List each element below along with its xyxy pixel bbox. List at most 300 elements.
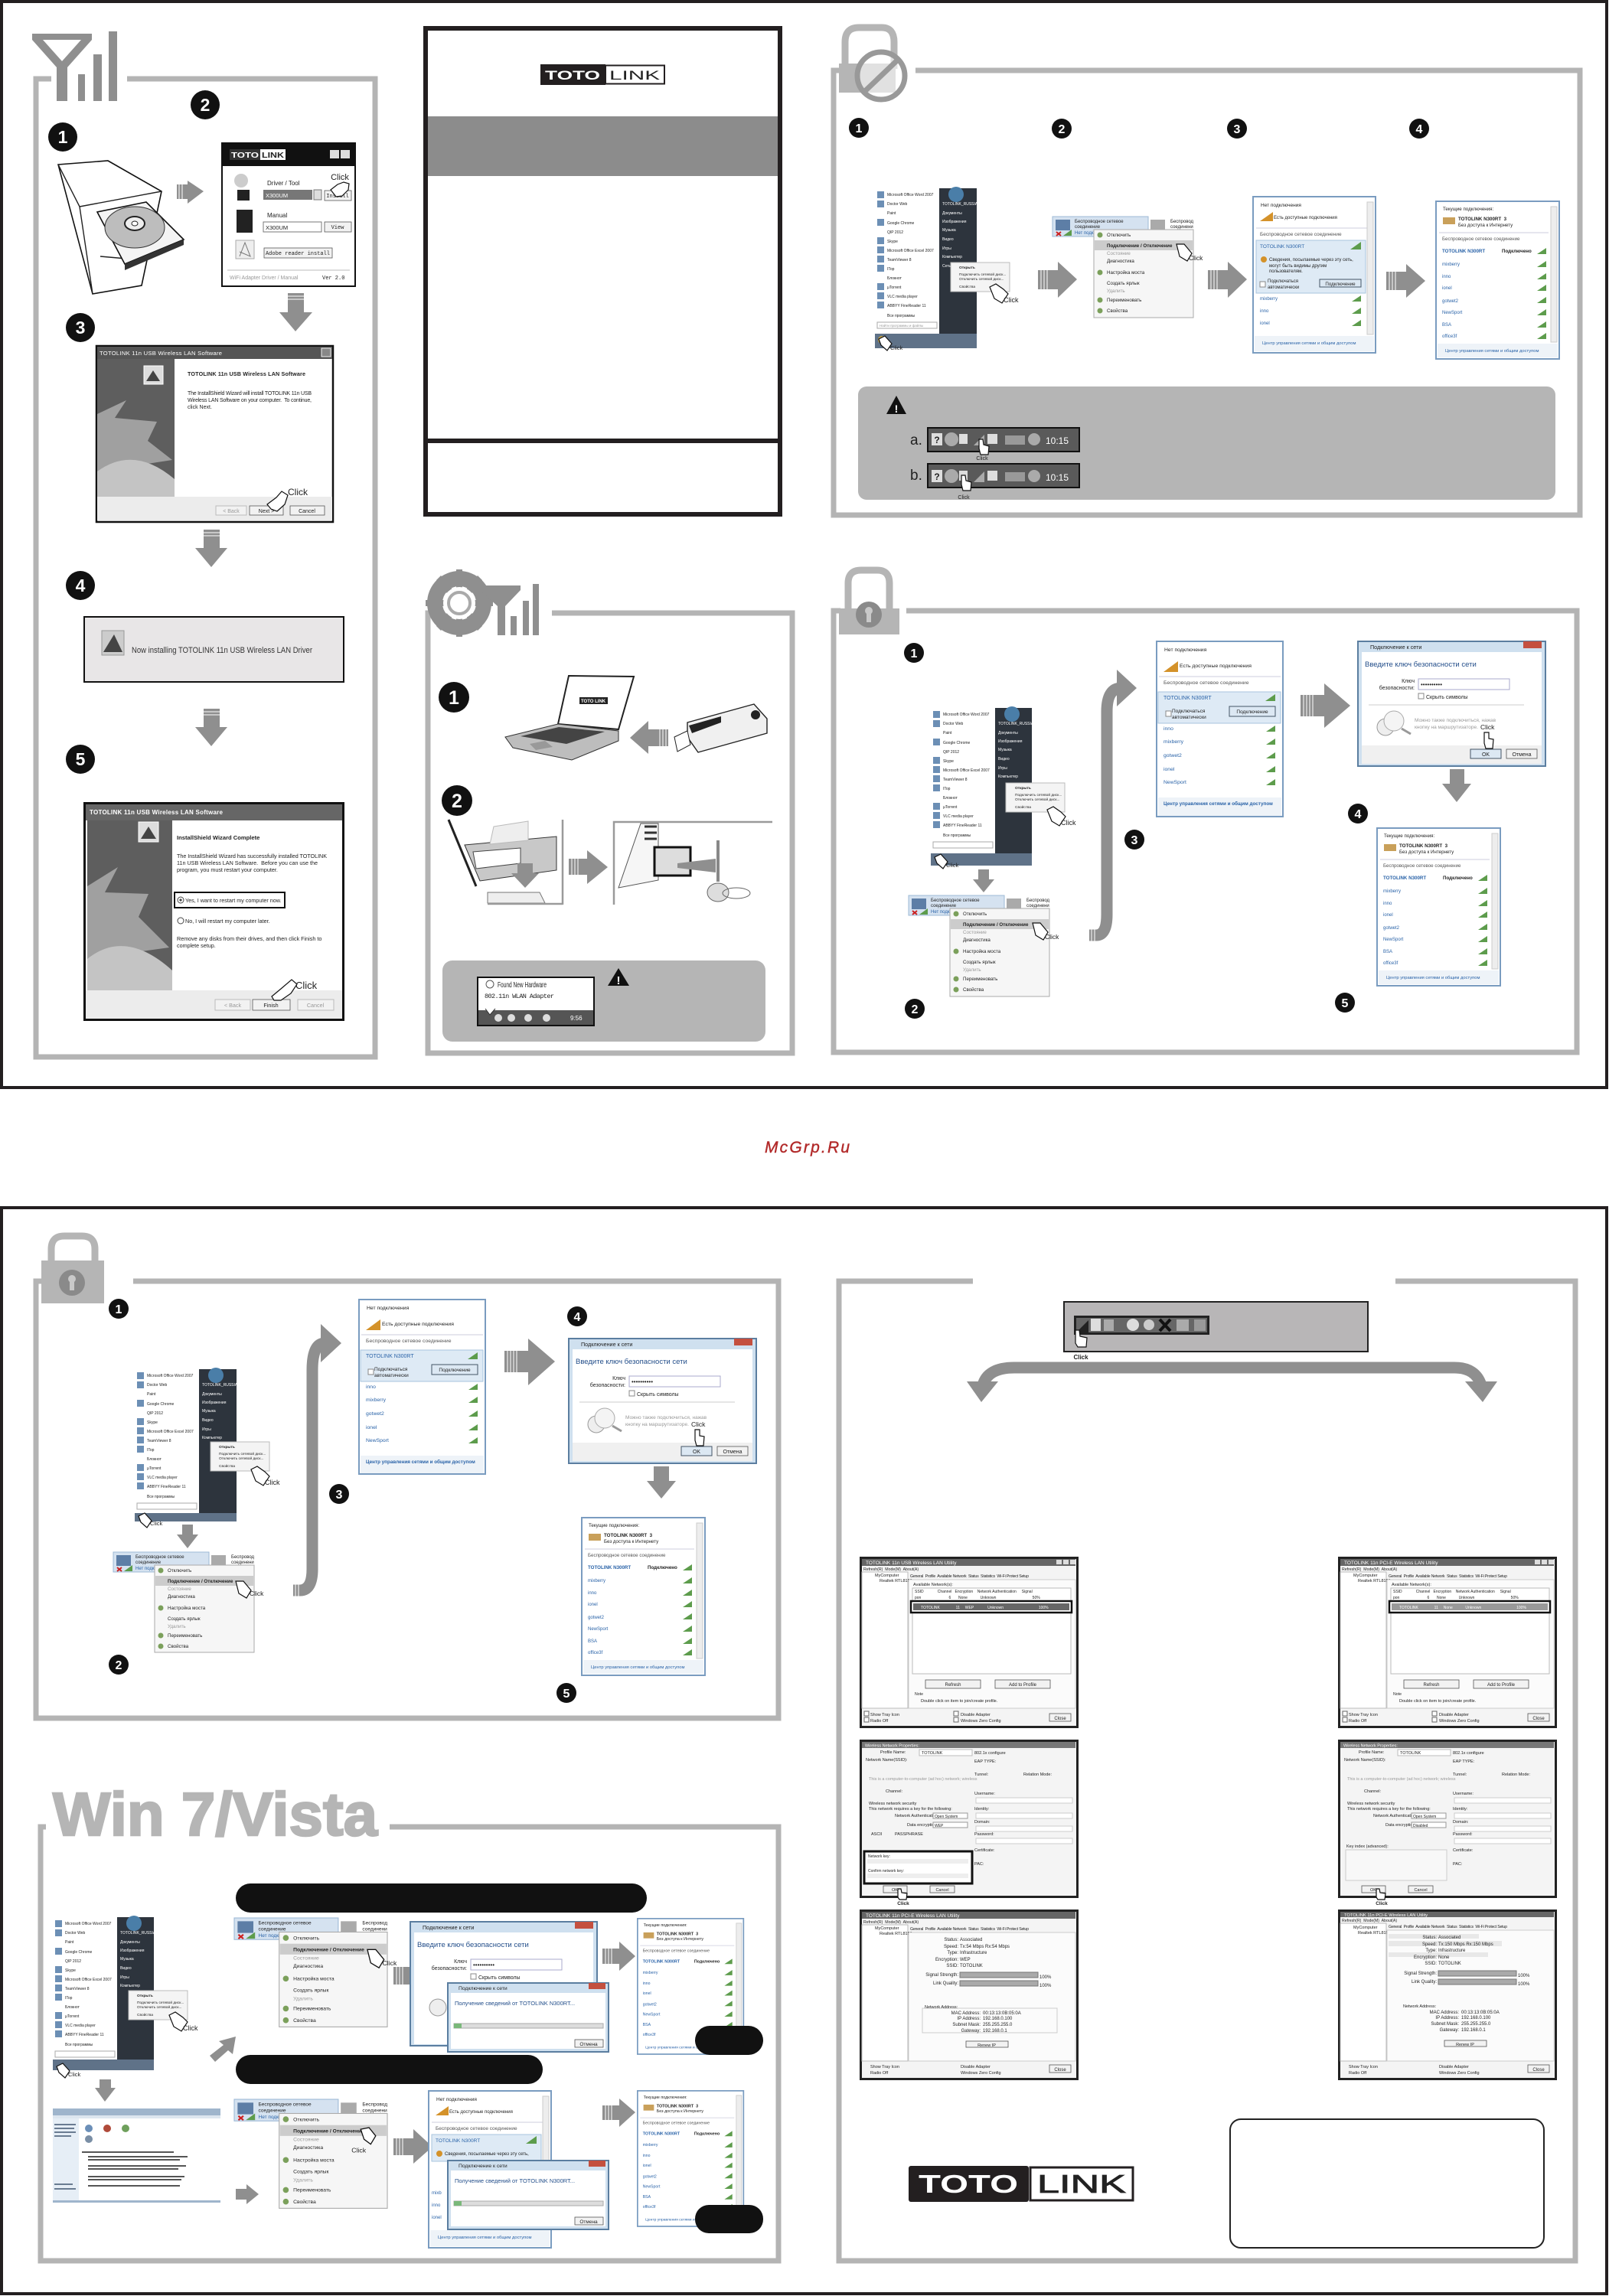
screenshot: network properties left: Network key: <box>868 1854 890 1859</box>
screenshot: available networks left: TOTOLINK 11n USB Wireless LAN Utility <box>866 1561 957 1566</box>
screenshot: connection context menu: соединени <box>1170 225 1193 230</box>
screenshot: start menu: Click <box>150 1520 162 1527</box>
screenshot: start menu: Microsoft Office Excel 2007 <box>147 1430 194 1434</box>
screenshot: start menu: Свойства <box>1015 804 1031 810</box>
screenshot: progress dialog A <box>448 1983 609 2052</box>
screenshot: status right: General Profile Available Network Status Statistics Wi-Fi Protect Setup <box>1389 1925 1507 1929</box>
screenshot: available networks left <box>860 1558 1078 1727</box>
screenshot: current connections: Без доступа к Интернету <box>1458 223 1513 228</box>
screenshot: start menu: ITop <box>943 787 951 791</box>
screenshot: context menu A <box>234 1918 397 2027</box>
screenshot: connection context menu: Удалить <box>963 967 981 973</box>
screenshot: connection context menu: Беспроводное сетевое <box>135 1555 184 1560</box>
screenshot: start menu: Все программы <box>147 1495 175 1499</box>
screenshot: start menu: Компьютер <box>120 1984 140 1988</box>
screenshot: status left: 192.168.0.100 <box>983 2017 1013 2021</box>
screenshot: current connections B: NewSport <box>643 2184 661 2189</box>
screenshot: connection context menu: Отключить <box>963 912 987 917</box>
screenshot: start menu: ABBYY FineReader 11 <box>887 304 926 308</box>
screenshot: context menu B: Click <box>351 2147 367 2154</box>
screenshot: start menu: Открыть <box>137 1994 153 1998</box>
screenshot: network properties left: Channel: <box>886 1789 902 1794</box>
screenshot: start menu: Музыка <box>942 228 956 233</box>
screenshot: context menu B: соединение <box>259 2108 286 2113</box>
heading: Win 7/Vista: Win 7/Vista <box>53 1780 378 1848</box>
screenshot: network properties right: Data encryption: <box>1385 1823 1417 1828</box>
screenshot: wifi list with security notice <box>1253 197 1376 353</box>
arrow: down <box>177 1525 198 1548</box>
screenshot: start menu: Блокнот <box>147 1457 162 1462</box>
screenshot: connection context menu: Отключить <box>168 1568 191 1574</box>
illustration: laptop: TOTO LINK <box>581 700 606 704</box>
screenshot: start menu: Подключить сетевой диск... <box>219 1451 266 1456</box>
arrow: right <box>602 1942 635 1971</box>
screenshot: start menu: Google Chrome <box>147 1402 175 1407</box>
step badge 1 <box>849 118 869 138</box>
screenshot: status left: Close <box>1054 2068 1066 2073</box>
window: installshield complete: Click <box>295 980 318 991</box>
window: installshield welcome: Cancel <box>299 509 315 514</box>
screenshot: current connections: Подключено <box>1443 876 1473 881</box>
screenshot: context menu B: соединени <box>362 2108 387 2113</box>
screenshot: current connections A: TOTOLINK N300RT <box>643 1959 680 1964</box>
screenshot: security key dialog: Click <box>1480 723 1495 731</box>
screenshot: current connections: office3f <box>1383 961 1398 966</box>
window: installshield welcome: The InstallShield Wizard will install TOTOLINK 11n USB <box>188 391 312 396</box>
screenshot: status left: Windows Zero Config <box>961 2071 1001 2076</box>
screenshot: connection context menu: Беспровод <box>1026 899 1050 903</box>
screenshot: connection context menu: Подключение / Отключение <box>1107 243 1173 249</box>
box: utility tray icon: Click <box>1073 1354 1088 1361</box>
screenshot: network properties right: Password: <box>1453 1832 1473 1837</box>
screenshot: start menu: Microsoft Office Word 2007 <box>65 1922 112 1926</box>
window: installshield welcome: Next > <box>259 509 274 514</box>
screenshot: available networks right <box>1340 1558 1555 1727</box>
icon: lock with keyhole <box>839 570 899 634</box>
screenshot: status left: Type: <box>947 1951 958 1955</box>
screenshot: status left: WEP <box>960 1958 971 1962</box>
screenshot: available networks right: Refresh(R) Mode(M) About(A) <box>1342 1567 1397 1572</box>
step badge 5: 5 <box>1342 997 1349 1010</box>
window: autorun menu: X300UM <box>266 224 288 231</box>
screenshot: wifi list with security notice: Центр управления сетями и общим доступом <box>1262 341 1356 346</box>
screenshot: current connections A: office3f <box>643 2033 656 2037</box>
screenshot: context menu B: Настройка моста <box>293 2157 335 2164</box>
screenshot: connection context menu: Переименовать <box>1107 298 1141 303</box>
screenshot: status right: Tx:150 Mbps Rx:150 Mbps <box>1438 1942 1493 1947</box>
step badge 1: 1 <box>856 122 863 135</box>
screenshot: current connections A: Центр управления сетями и общим доступом <box>645 2045 726 2050</box>
screenshot: context menu B: Свойства <box>293 2199 316 2205</box>
screenshot: network properties left: WEP <box>935 1824 944 1828</box>
screenshot: wifi list with security notice: пользователям. <box>1269 269 1303 274</box>
screenshot: available networks right: TOTOLINK 11n PCI-E Wireless LAN Utility <box>1344 1561 1438 1566</box>
screenshot: status right: Encryption: <box>1414 1955 1437 1960</box>
screenshot: status left: 100% <box>1039 1984 1052 1988</box>
screenshot: connection context menu: Состояние <box>168 1587 191 1592</box>
arrow: right <box>569 850 608 884</box>
screenshot: wifi list B: inno <box>432 2203 441 2208</box>
arrow: right <box>504 1339 555 1385</box>
screenshot: context menu B: Диагностика <box>293 2145 323 2151</box>
screenshot: available networks left: Disable Adapter <box>961 1713 991 1717</box>
screenshot: network properties right: Confirm network key: <box>1346 1869 1386 1874</box>
screenshot: wifi list: mixberry <box>366 1397 387 1403</box>
screenshot: network properties left: Network Name(SSID): <box>866 1758 908 1763</box>
screenshot: connection context menu: Отключить <box>1107 233 1131 238</box>
screenshot: status left: Radio Off <box>870 2071 889 2076</box>
screenshot: wifi list B <box>429 2091 551 2248</box>
screenshot: security key dialog: Скрыть символы <box>637 1392 679 1397</box>
screenshot: connection context menu: Создать ярлык <box>963 960 996 965</box>
screenshot: connection context menu: соединени <box>231 1561 254 1565</box>
screenshot: context menu B: Подключение / Отключение <box>293 2128 364 2134</box>
screenshot: network properties left: EAP TYPE: <box>974 1760 997 1764</box>
tray b: ? <box>934 471 940 482</box>
screenshot: current connections: Беспроводное сетевое соединение <box>588 1553 666 1558</box>
logo: TOTO LINK <box>540 64 664 85</box>
screenshot: security key dialog: •••••••••• <box>632 1378 653 1385</box>
screenshot: context menu A: Переименовать <box>293 2007 331 2012</box>
screenshot: start menu: Paint <box>943 731 952 735</box>
screenshot: network properties right: Relation Mode: <box>1502 1773 1530 1777</box>
screenshot: security key dialog: Отмена <box>1512 752 1532 758</box>
screenshot: status left: Disable Adapter <box>961 2065 991 2069</box>
screenshot: network properties left: Tunnel: <box>974 1773 989 1777</box>
arrow: right small <box>236 2184 259 2204</box>
screenshot: available networks left: pon 6 None Unknown 50% <box>915 1596 1040 1600</box>
screenshot: network properties right: Wireless Network Properties: <box>1343 1743 1398 1748</box>
screenshot: security key dialog: OK <box>1482 752 1490 758</box>
screenshot: status right: Status: <box>1422 1936 1437 1940</box>
screenshot: context menu B: Переименовать <box>293 2188 331 2193</box>
screenshot: status right: 192.168.0.1 <box>1461 2028 1486 2033</box>
screenshot: network properties left: Network Authentication: <box>895 1814 939 1818</box>
screenshot: connection context menu: Click <box>1189 254 1203 262</box>
screenshot: context menu A: соединени <box>362 1926 387 1932</box>
screenshot: status left: IP Address: <box>957 2017 981 2021</box>
tray b: b. <box>910 468 922 484</box>
screenshot: start menu: Skype <box>65 1968 76 1973</box>
screenshot: start menu: Изображения <box>120 1949 145 1953</box>
screenshot: available networks left: Realtek RTL8192 <box>880 1579 912 1583</box>
screenshot: status right: Link Quality: <box>1412 1980 1437 1985</box>
screenshot: wifi list: Нет подключения <box>367 1306 410 1311</box>
step badge 1: 1 <box>449 687 459 709</box>
screenshot: available networks left: Available Network(s): <box>913 1583 953 1587</box>
screenshot: security key dialog <box>1358 641 1545 766</box>
screenshot: wifi list with security notice: Подключаться <box>1268 279 1298 284</box>
pill: result B <box>695 2205 763 2233</box>
screenshot: status left: 00:13:13:0B:05:0A <box>983 2011 1021 2016</box>
panel: secured connection <box>834 570 1577 1052</box>
screenshot: start menu: Skype <box>147 1420 158 1425</box>
screenshot: status right: 100% <box>1518 1982 1530 1987</box>
window: installing driver: Now installing TOTOLINK 11n USB Wireless LAN Driver <box>132 646 312 655</box>
screenshot: current connections B: Беспроводное сетевое соединение <box>643 2122 710 2126</box>
screenshot: start menu: Компьютер <box>942 255 962 259</box>
step badge 2 <box>905 999 925 1019</box>
screenshot: connection context menu: Беспровод <box>231 1555 255 1560</box>
screenshot: wifi list with security notice: Нет подключения <box>1261 203 1301 208</box>
screenshot: security key dialog A: Ключ <box>454 1959 467 1965</box>
arrow: down <box>279 293 312 331</box>
panel: WPS/unsecured connection <box>834 28 1580 515</box>
band: title strip <box>428 116 778 176</box>
screenshot: current connections B: Текущие подключения: <box>644 2095 687 2100</box>
screenshot: wifi list: Есть доступные подключения <box>382 1322 454 1327</box>
screenshot: connection context menu: соединение <box>1075 225 1101 230</box>
screenshot: current connections A: mixberry <box>643 1971 658 1975</box>
screenshot: status right: MAC Address: <box>1430 2011 1459 2015</box>
step badge 5: 5 <box>563 1688 570 1701</box>
screenshot: current connections: BSA <box>1383 950 1392 954</box>
screenshot: security key dialog: безопасности: <box>590 1382 625 1388</box>
step badge 5 <box>66 745 95 774</box>
screenshot: context menu B: Состояние <box>293 2137 319 2142</box>
panel: secured connection sheet two <box>36 1236 778 1718</box>
screenshot: current connections B: TOTOLINK N300RT <box>643 2131 680 2136</box>
screenshot: wifi list: NewSport <box>1164 780 1186 785</box>
screenshot: context menu B: Удалить <box>293 2178 313 2183</box>
screenshot: start menu: Подключить сетевой диск... <box>137 2000 184 2005</box>
screenshot: available networks right: Radio Off <box>1349 1719 1367 1724</box>
screenshot: network properties right: Domain: <box>1453 1820 1469 1825</box>
screenshot: start menu: QIP 2012 <box>65 1959 81 1964</box>
screenshot: current connections <box>1377 828 1500 986</box>
arrow: right <box>1301 683 1350 728</box>
step badge 3 <box>1227 119 1247 139</box>
screenshot: network properties right: 802.1x configure <box>1453 1751 1484 1756</box>
step badge 3: 3 <box>1131 834 1138 847</box>
screenshot: network properties right <box>1340 1740 1555 1906</box>
screenshot: start menu: Microsoft Office Excel 2007 <box>65 1978 112 1982</box>
screenshot: network properties left: Click <box>897 1901 909 1906</box>
screenshot: wifi list B: Беспроводное сетевое соединение <box>436 2126 517 2131</box>
screenshot: wifi list: Беспроводное сетевое соединение <box>1164 680 1249 686</box>
icon: antenna signal <box>32 31 117 101</box>
screenshot: start menu: ABBYY FineReader 11 <box>65 2033 104 2037</box>
pill: heading A <box>236 1883 647 1913</box>
screenshot: security key dialog: Ключ <box>1402 679 1415 684</box>
screenshot: start menu: QIP 2012 <box>887 230 903 235</box>
screenshot: status right: TOTOLINK 11n PCI-E Wireless LAN Utility <box>1344 1913 1428 1918</box>
screenshot: status right: Close <box>1532 2068 1545 2073</box>
arrow: right <box>177 181 204 204</box>
screenshot: network properties left: Relation Mode: <box>1023 1773 1052 1777</box>
screenshot: current connections: inno <box>1442 275 1451 279</box>
screenshot: connection context menu: Подключение / Отключение <box>963 922 1029 928</box>
screenshot: connection context menu: Переименовать <box>168 1633 202 1639</box>
window: installshield welcome: Wireless LAN Software on your computer. To continue, <box>188 398 312 403</box>
step badge 3 <box>1124 830 1144 850</box>
screenshot: connection context menu: Состояние <box>1107 251 1131 256</box>
screenshot: connection context menu: соединение <box>931 904 957 908</box>
screenshot: available networks right: Realtek RTL8192 <box>1358 1579 1391 1583</box>
logo: TOTO LINK: LINK <box>609 68 661 83</box>
screenshot: wifi list B: Нет подключения <box>436 2097 477 2102</box>
screenshot: network properties right: Cancel <box>1414 1888 1428 1893</box>
screenshot: available networks left: Add to Profile <box>1009 1683 1037 1688</box>
screenshot: security key dialog: Отмена <box>723 1450 742 1455</box>
screenshot: status right: Disable Adapter <box>1439 2065 1469 2069</box>
screenshot: current connections: office3f <box>1442 334 1457 339</box>
box: utility tray icon <box>1064 1302 1368 1361</box>
screenshot: network properties left: PAC: <box>974 1862 984 1867</box>
screenshot: connection context menu: Беспроводное сетевое <box>931 899 980 903</box>
step badge 3: 3 <box>336 1489 343 1502</box>
illustration: computer with CD tray <box>58 161 184 294</box>
arrow: right <box>1208 262 1247 298</box>
screenshot: start menu: Click <box>265 1479 280 1486</box>
screenshot: available networks left: Refresh(R) Mode(M) About(A) <box>863 1567 919 1572</box>
screenshot: security key dialog A <box>410 1922 597 2046</box>
screenshot: progress dialog B: Отмена <box>579 2219 598 2225</box>
screenshot: status right: Gateway: <box>1440 2028 1459 2033</box>
step badge 2 <box>109 1655 129 1675</box>
tooltip: found new hardware: 9:56 <box>570 1015 583 1022</box>
screenshot: security key dialog A: Введите ключ безопасности сети <box>417 1941 529 1949</box>
step badge 4: 4 <box>574 1311 581 1324</box>
screenshot: progress dialog A: Подключение к сети <box>459 1986 508 1991</box>
screenshot: available networks left: Windows Zero Config <box>961 1719 1001 1724</box>
screenshot: network properties left: TOTOLINK <box>922 1751 943 1756</box>
screenshot: available networks left: TOTOLINK 11 WEP Unknown 100% <box>921 1606 1049 1610</box>
screenshot: start menu: Свойства <box>219 1463 235 1469</box>
screenshot: network properties right: This network requires a key for the following: <box>1347 1807 1431 1812</box>
step badge 2: 2 <box>116 1659 122 1672</box>
tray b <box>910 464 1079 501</box>
page frame: sheet one <box>2 2 1607 1088</box>
screenshot: security key dialog A: Подключение к сети <box>423 1924 474 1931</box>
screenshot: start menu: QIP 2012 <box>943 750 959 755</box>
screenshot: start menu: Документы <box>942 211 962 216</box>
screenshot: start menu: Блокнот <box>887 276 902 281</box>
screenshot: current connections B: BSA <box>643 2195 651 2200</box>
screenshot: status left: Refresh(R) Mode(M) About(A) <box>863 1920 919 1925</box>
screenshot: start menu: Видео <box>202 1418 214 1423</box>
illustration: USB adapter <box>674 704 767 752</box>
screenshot: start menu: Microsoft Office Word 2007 <box>147 1374 194 1378</box>
screenshot: status right <box>1340 1910 1555 2079</box>
screenshot: network properties left: Cancel <box>935 1888 949 1893</box>
window: autorun menu: WiFi Adapter Driver / Manual <box>230 276 299 281</box>
screenshot: wifi list: ionel <box>366 1425 377 1430</box>
window: installshield complete: InstallShield Wizard Complete <box>177 834 259 841</box>
step badge 4 <box>567 1306 587 1326</box>
step badge 4 <box>1409 119 1429 139</box>
screenshot: connection context menu: Click <box>1045 933 1059 941</box>
arrow: right <box>1386 264 1425 298</box>
screenshot: current connections: Центр управления сетями и общим доступом <box>591 1665 684 1670</box>
tooltip: found new hardware <box>478 977 594 1026</box>
screenshot: current connections: inno <box>1383 902 1392 906</box>
step badge 4: 4 <box>1355 808 1362 821</box>
screenshot: status right: Refresh(R) Mode(M) About(A) <box>1342 1919 1397 1923</box>
screenshot: current connections: ionel <box>1383 913 1393 918</box>
screenshot: available networks left: Show Tray Icon <box>870 1713 899 1717</box>
screenshot: start menu: Отключить сетевой диск... <box>219 1456 263 1461</box>
window: autorun menu: Ver 2.0 <box>322 276 344 282</box>
screenshot: start menu: Все программы <box>943 833 971 838</box>
screenshot: wifi list: Подключаться <box>374 1367 408 1372</box>
screenshot: network properties left: PASSPHRASE <box>895 1832 923 1837</box>
screenshot: network properties left <box>860 1740 1078 1906</box>
box: contact rounded frame <box>1230 2119 1544 2248</box>
screenshot: status right: Network Address: <box>1403 2004 1437 2009</box>
screenshot: network properties right: Channel: <box>1364 1789 1381 1794</box>
screenshot: context menu A: Беспровод <box>362 1921 387 1926</box>
screenshot: start menu: Все программы <box>887 314 915 318</box>
screenshot: start menu: Microsoft Office Excel 2007 <box>887 249 934 253</box>
screenshot: start menu: QIP 2012 <box>147 1411 163 1416</box>
screenshot: start menu: ABBYY FineReader 11 <box>147 1485 186 1489</box>
screenshot: security key dialog: Подключение к сети <box>581 1341 632 1348</box>
screenshot: start menu: ITop <box>147 1448 155 1453</box>
screenshot: wifi list with security notice: mixberry <box>1260 297 1278 302</box>
screenshot: current connections B: mixberry <box>643 2143 658 2148</box>
screenshot: wifi list: gotwet2 <box>1164 753 1182 758</box>
window: autorun menu: Adobe reader install <box>266 251 330 257</box>
screenshot: network properties right: EAP TYPE: <box>1453 1760 1475 1764</box>
screenshot: start menu: Игры <box>202 1427 211 1432</box>
screenshot: start menu: Google Chrome <box>943 741 971 745</box>
screenshot: current connections A: Подключено <box>694 1959 720 1964</box>
tooltip: found new hardware: 802.11n WLAN Adapter <box>485 993 554 1000</box>
tray b: Click <box>958 495 970 501</box>
screenshot: current connections B: inno <box>643 2154 651 2158</box>
screenshot: network properties right: TOTOLINK <box>1400 1751 1421 1756</box>
screenshot: current connections: Подключено <box>648 1565 677 1570</box>
screenshot: network properties right: Open System <box>1413 1815 1436 1819</box>
screenshot: start menu: Изображения <box>942 220 967 224</box>
window: installshield complete: 11n USB Wireless LAN Software. Before you can use the <box>177 859 318 866</box>
screenshot: current connections B: gotwet2 <box>643 2174 657 2179</box>
screenshot: connection context menu: Настройка моста <box>168 1606 206 1611</box>
step badge 4: 4 <box>1416 123 1423 136</box>
screenshot: current connections: Беспроводное сетевое соединение <box>1383 863 1461 869</box>
window: installshield welcome: Click <box>288 487 308 497</box>
step badge 3: 3 <box>76 318 85 338</box>
screenshot: start menu: Paint <box>887 211 896 216</box>
screenshot: connection context menu: Создать ярлык <box>168 1616 201 1622</box>
screenshot: connection context menu: Переименовать <box>963 977 997 982</box>
step badge 1 <box>109 1299 129 1319</box>
screenshot: start menu: TOTOLINK_RUSSIA <box>120 1931 156 1936</box>
screenshot: start menu <box>53 1916 198 2078</box>
screenshot: security key dialog: Можно также подключиться, нажав <box>625 1415 707 1420</box>
screenshot: context menu A: Создать ярлык <box>293 1988 328 1994</box>
screenshot: network properties right: Key index (advanced): <box>1346 1844 1389 1849</box>
screenshot: network properties left: Profile Name: <box>880 1750 906 1755</box>
arrow: down <box>95 2079 116 2102</box>
icon: warning: ! <box>895 403 898 415</box>
screenshot: wifi list: TOTOLINK N300RT <box>1164 696 1212 701</box>
screenshot: current connections A: Без доступа к Интернету <box>657 1937 703 1942</box>
screenshot: current connections: Центр управления сетями и общим доступом <box>1445 349 1539 354</box>
screenshot: context menu A: Нет подк <box>259 1933 279 1939</box>
step badge 5: 5 <box>76 749 86 769</box>
screenshot: status left: Subnet Mask: <box>952 2023 981 2027</box>
screenshot: start menu: Doctor Web <box>943 722 964 726</box>
arrow: curved up <box>293 1324 341 1596</box>
screenshot: current connections A: Беспроводное сетевое соединение <box>643 1949 710 1954</box>
callout: new hardware found <box>442 960 765 1042</box>
illustration: antenna connection <box>614 822 772 905</box>
screenshot: wifi list: TOTOLINK N300RT <box>366 1354 414 1359</box>
screenshot: status left: Network Address: <box>925 2005 958 2010</box>
arrow: curved up <box>1089 670 1137 941</box>
